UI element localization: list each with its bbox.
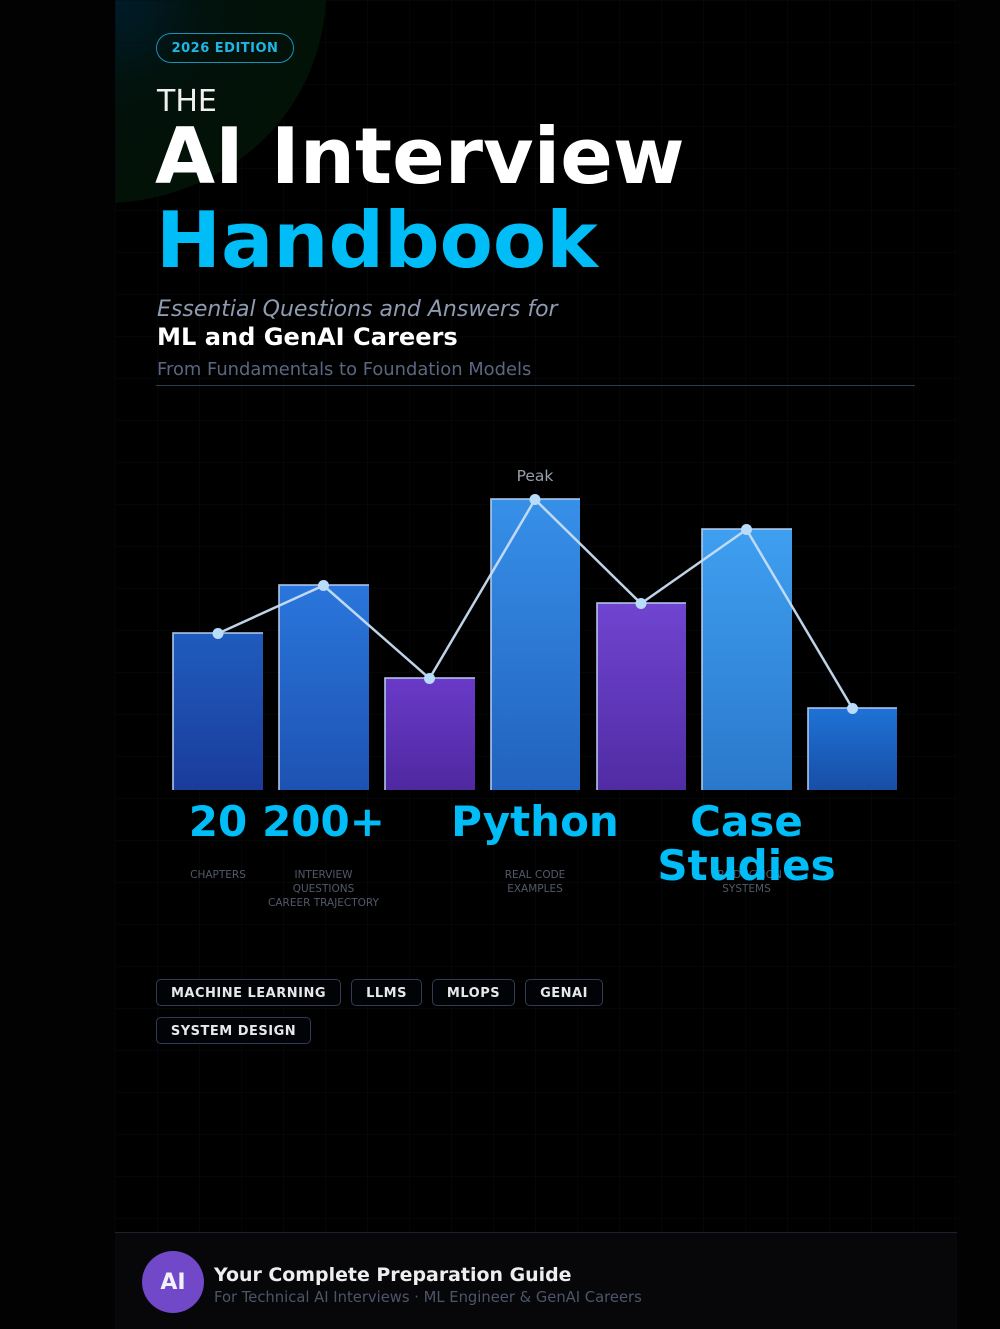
title: AI Interview: AI Interview	[155, 112, 685, 202]
icon: AI circle: AI	[160, 1270, 186, 1295]
edition badge: 2026 EDITION	[172, 41, 278, 56]
tag: LLMS	[366, 986, 407, 1001]
peak label: Peak	[517, 467, 553, 485]
stat: interview questions	[262, 797, 385, 909]
footer heading: Your Complete Preparation Guide	[214, 1264, 571, 1286]
tag	[351, 979, 422, 1006]
icon: AI circle	[142, 1251, 204, 1313]
stat value: 20	[189, 797, 247, 846]
stat label	[268, 869, 379, 909]
title: Handbook: Handbook	[156, 196, 598, 286]
bar and line chart	[172, 467, 897, 790]
subtitle tagline: From Fundamentals to Foundation Models	[157, 359, 531, 380]
stat value: Python	[451, 797, 619, 846]
trend line	[212, 494, 858, 714]
tag	[156, 1017, 311, 1044]
stat label: PRODUCTION	[711, 869, 782, 881]
edition badge	[156, 33, 294, 63]
tag	[525, 979, 603, 1006]
footer	[115, 1232, 957, 1329]
stat label	[505, 869, 565, 895]
subtitle italic: Essential Questions and Answers for	[157, 297, 558, 322]
stat label: EXAMPLES	[507, 883, 563, 895]
stat label: QUESTIONS	[293, 883, 354, 895]
stat label: CAREER TRAJECTORY	[268, 897, 379, 909]
tag: MLOPS	[447, 986, 500, 1001]
tag: SYSTEM DESIGN	[171, 1024, 296, 1039]
footer subtext: For Technical AI Interviews · ML Engineer & GenAI Careers	[214, 1289, 642, 1306]
topic tags	[156, 979, 603, 1044]
stat label: INTERVIEW	[294, 869, 353, 881]
stat: python	[451, 797, 619, 895]
tag: MACHINE LEARNING	[171, 986, 326, 1001]
stat value: 200+	[262, 797, 385, 846]
subtitle bold: ML and GenAI Careers	[157, 323, 458, 351]
stat label: REAL CODE	[505, 869, 565, 881]
stat value	[657, 797, 836, 890]
stat value: Studies	[657, 841, 836, 890]
tag: GENAI	[540, 986, 588, 1001]
stat label: SYSTEMS	[722, 883, 771, 895]
bars	[173, 499, 897, 790]
stat value: Case	[690, 797, 803, 846]
subtitle block	[157, 297, 559, 380]
title	[155, 84, 685, 286]
tag	[432, 979, 515, 1006]
divider	[156, 385, 915, 386]
tag	[156, 979, 341, 1006]
stat label: CHAPTERS	[190, 869, 246, 881]
stat label	[711, 869, 782, 895]
title: THE: THE	[157, 84, 217, 119]
stat: case studies	[657, 797, 836, 895]
stat: chapters	[189, 797, 247, 881]
